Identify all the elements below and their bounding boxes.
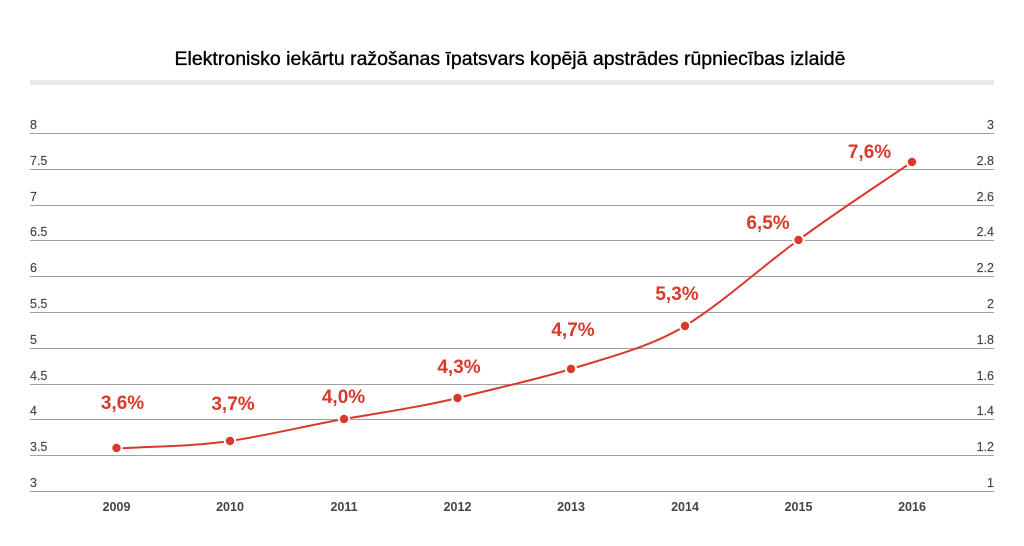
value labels: 7,6% [848, 142, 891, 163]
right axis labels: 1.6 [977, 369, 994, 383]
value labels: 4,0% [322, 387, 365, 408]
value labels: 3,6% [101, 393, 144, 414]
right axis labels: 3 [987, 118, 994, 132]
left axis labels: 7 [30, 190, 37, 204]
left axis labels: 6.5 [30, 225, 47, 239]
right axis labels: 1.4 [977, 404, 994, 418]
left axis labels: 5 [30, 333, 37, 347]
value labels: 4,3% [437, 357, 481, 378]
right axis labels: 1 [987, 476, 994, 490]
right axis labels: 1.2 [977, 440, 994, 454]
left axis labels: 8 [30, 118, 37, 132]
value labels: 6,5% [746, 213, 790, 234]
year labels: 2012 [444, 500, 471, 514]
year labels: 2016 [898, 500, 926, 514]
left axis labels: 4.5 [30, 369, 47, 383]
right axis labels [977, 118, 994, 490]
grid lines [30, 134, 994, 492]
year labels: 2015 [785, 500, 812, 514]
year labels: 2011 [330, 500, 358, 514]
year labels [103, 500, 926, 514]
right axis labels: 2 [987, 297, 994, 311]
title: Elektronisko iekārtu ražošanas īpatsvars kopējā apstrādes rūpniecības izlaidē [174, 48, 846, 70]
trend line [116, 162, 912, 448]
left axis labels: 6 [30, 261, 37, 275]
left axis labels: 3.5 [30, 440, 47, 454]
year labels: 2010 [216, 500, 244, 514]
data points [111, 157, 917, 453]
year labels: 2009 [103, 500, 130, 514]
left axis labels: 4 [30, 404, 37, 418]
value labels: 4,7% [551, 320, 595, 341]
left axis labels: 5.5 [30, 297, 47, 311]
year labels: 2013 [557, 500, 585, 514]
year labels: 2014 [671, 500, 699, 514]
left axis labels: 7.5 [30, 154, 47, 168]
right axis labels: 2.8 [977, 154, 994, 168]
value labels: 5,3% [655, 284, 699, 305]
value labels [101, 142, 891, 415]
right axis labels: 2.2 [977, 261, 994, 275]
right axis labels: 1.8 [977, 333, 994, 347]
left axis labels [30, 118, 47, 490]
title divider bar [30, 80, 994, 85]
left axis labels: 3 [30, 476, 37, 490]
value labels: 3,7% [211, 394, 255, 415]
right axis labels: 2.6 [977, 190, 994, 204]
right axis labels: 2.4 [977, 225, 994, 239]
